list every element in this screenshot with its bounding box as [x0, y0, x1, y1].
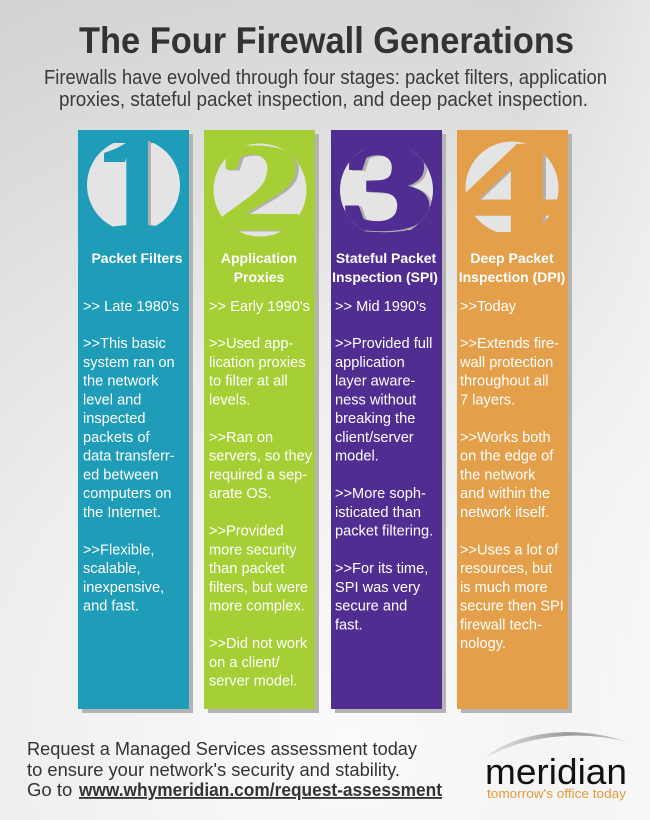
call to action: www.whymeridian.com/request-assessment: [78, 779, 442, 800]
panel: 3 stateful packet inspection: >>Provided full: [335, 336, 432, 352]
panel: 4 deep packet inspection: resources, but: [460, 561, 552, 577]
icon: number 1: 1: [100, 104, 176, 265]
panel: 4 deep packet inspection: and within the: [460, 486, 550, 502]
call to action: [27, 738, 442, 800]
panel: 3 stateful packet inspection: layer aware-: [335, 374, 415, 390]
panel: 1 packet filters: system ran on: [83, 355, 175, 371]
panel: 3 stateful packet inspection: client/server: [335, 430, 414, 446]
panel: 3 stateful packet inspection: >>For its time,: [335, 561, 428, 577]
heading: Application: [221, 250, 297, 266]
text: >> Early 1990's: [209, 299, 310, 315]
panel: 2 application proxies: >>Ran on: [209, 430, 273, 446]
panel: 2 application proxies: server model.: [209, 674, 297, 690]
text: >> Mid 1990's: [335, 299, 426, 315]
panel: 3 stateful packet inspection: ness without: [335, 392, 416, 408]
panel: 1 packet filters: inspected: [83, 411, 145, 427]
call to action: Request a Managed Services assessment today: [27, 738, 418, 759]
icon: number 2: [214, 144, 306, 236]
icon: number 4: 4: [454, 115, 558, 259]
wordmark: meridian: [485, 751, 627, 792]
panel: 4 deep packet inspection: wall protection: [459, 355, 553, 371]
panel: 1 packet filters: the Internet.: [83, 505, 161, 521]
panel: 4 deep packet inspection: 7 layers.: [460, 392, 515, 408]
heading: Packet Filters: [91, 250, 183, 266]
panel: 3 stateful packet inspection: fast.: [335, 617, 363, 633]
heading: Stateful Packet: [336, 250, 437, 266]
panel: 4 deep packet inspection: firewall tech-: [460, 617, 542, 633]
panel: 1 packet filters: level and: [83, 392, 141, 408]
panel: 4 deep packet inspection: Inspection (DPI): [459, 269, 565, 285]
panel: 4 deep packet inspection: nology.: [460, 636, 506, 652]
panel: 4 deep packet inspection: is much more: [460, 580, 548, 596]
panel: 3 stateful packet inspection: application: [335, 355, 405, 371]
panel: 1 packet filters: [78, 104, 193, 713]
subtitle: Firewalls have evolved through four stages: packet filters, application: [44, 67, 607, 89]
panel: 3 stateful packet inspection: [331, 119, 446, 713]
panel: 2 application proxies: than packet: [209, 561, 284, 577]
icon: number 2: 2: [217, 119, 303, 256]
panel: 1 packet filters: the network: [83, 374, 159, 390]
panel: 1 packet filters: data transferr-: [83, 448, 175, 464]
icon: number 1: 1: [97, 104, 173, 265]
panel: 2 application proxies: lication proxies: [209, 355, 306, 371]
panel: 4 deep packet inspection: the network: [460, 467, 536, 483]
panel: 1 packet filters: >>This basic: [83, 336, 166, 352]
text: >> Late 1980's: [83, 299, 179, 315]
icon: number 3: [340, 147, 433, 232]
panel: 2 application proxies: filters, but were: [209, 580, 308, 596]
panel: 2 application proxies: Proxies: [234, 269, 285, 285]
panel: 4 deep packet inspection: secure then SPI: [460, 598, 564, 614]
panel: 2 application proxies: to filter at all: [209, 374, 288, 390]
panel: 3 stateful packet inspection: breaking the: [335, 411, 415, 427]
call to action: to ensure your network's security and stability.: [27, 759, 400, 780]
panel: 2 application proxies: more security: [209, 542, 297, 558]
panel: 4 deep packet inspection: network itself.: [460, 505, 549, 521]
panel: 3 stateful packet inspection: isticated than: [335, 505, 421, 521]
panel: 1 packet filters: inexpensive,: [83, 580, 164, 596]
logo: meridian: [485, 732, 627, 801]
icon: swoosh: [485, 732, 627, 758]
panel: 1 packet filters: ed between: [83, 467, 158, 483]
panel: 2 application proxies: on a client/: [209, 655, 281, 671]
panel: 2 application proxies: >>Did not work: [209, 636, 308, 652]
icon: number 4: 4: [457, 115, 561, 259]
panel: 2 application proxies: >>Provided: [209, 524, 284, 540]
panel: 3 stateful packet inspection: Inspection (SPI): [332, 269, 438, 285]
icon: number 1: [87, 138, 180, 232]
panel: 2 application proxies: required a sep-: [209, 467, 307, 483]
panel: 2 application proxies: levels.: [209, 392, 250, 408]
panel: 2 application proxies: more complex.: [209, 598, 305, 614]
panel: 1 packet filters: computers on: [83, 486, 171, 502]
panel: 1 packet filters: scalable,: [83, 561, 141, 577]
panel: 4 deep packet inspection: on the edge of: [460, 448, 554, 464]
panel: 4 deep packet inspection: >>Extends fire-: [460, 336, 559, 352]
icon: number 4: [466, 142, 558, 232]
panel: 3 stateful packet inspection: secure and: [335, 598, 407, 614]
panel: 2 application proxies: >>Used app-: [209, 336, 294, 352]
panel: 2 application proxies: [204, 119, 319, 713]
panel: 4 deep packet inspection: [454, 115, 572, 713]
subtitle: [44, 67, 607, 111]
panel: 2 application proxies: arate OS.: [209, 486, 271, 502]
subtitle: proxies, stateful packet inspection, and deep packet inspection.: [59, 89, 588, 111]
title: The Four Firewall Generations: [79, 20, 574, 61]
panel: 1 packet filters: and fast.: [83, 598, 139, 614]
icon: number 3: 3: [344, 120, 436, 256]
heading: Deep Packet: [470, 250, 554, 266]
call to action: Go to: [27, 779, 72, 800]
panel: 1 packet filters: packets of: [83, 430, 150, 446]
panel: 4 deep packet inspection: >>Uses a lot of: [460, 542, 559, 558]
panel: 3 stateful packet inspection: packet filtering.: [335, 524, 433, 540]
panel: 3 stateful packet inspection: SPI was very: [335, 580, 421, 596]
panel: 4 deep packet inspection: throughout all: [460, 374, 548, 390]
panel: 4 deep packet inspection: >>Works both: [460, 430, 551, 446]
text: >>Today: [460, 299, 517, 315]
icon: number 3: 3: [341, 119, 433, 255]
panel: 3 stateful packet inspection: model.: [335, 448, 379, 464]
panel: 3 stateful packet inspection: >>More soph-: [335, 486, 426, 502]
panel: 1 packet filters: >>Flexible,: [83, 542, 154, 558]
tagline: tomorrow's office today: [487, 786, 627, 801]
panel: 2 application proxies: servers, so they: [209, 448, 313, 464]
icon: number 2: 2: [220, 120, 306, 257]
